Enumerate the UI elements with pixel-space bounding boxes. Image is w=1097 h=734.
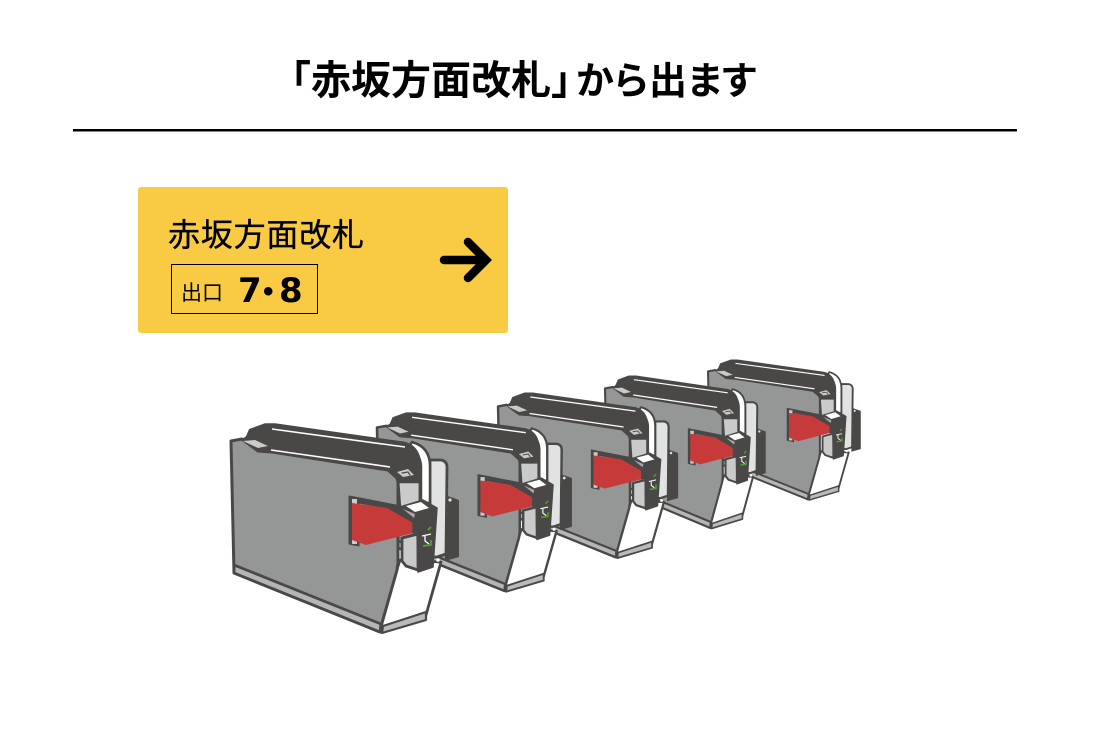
divider line <box>73 129 1017 132</box>
exit number box: • <box>263 275 274 308</box>
exit number box: 7 <box>238 271 262 311</box>
ticket gate 1 <box>231 424 459 633</box>
ticket gate 2 <box>377 413 572 592</box>
exit number box: 8 <box>279 271 303 311</box>
panel: yellow exit sign <box>138 187 508 333</box>
ticket gate 5 <box>708 360 861 500</box>
illustration: row of ticket gates <box>231 360 861 633</box>
exit number box: 出口 <box>181 282 223 305</box>
title: 「赤坂方面改札」 <box>271 59 591 103</box>
sign heading: 赤坂方面改札 <box>168 217 364 253</box>
title: から出ます <box>576 61 758 103</box>
ticket gate 3 <box>498 393 678 558</box>
icon: right arrow <box>444 242 486 278</box>
exit number box <box>172 264 318 314</box>
ticket gate 4 <box>605 376 766 529</box>
